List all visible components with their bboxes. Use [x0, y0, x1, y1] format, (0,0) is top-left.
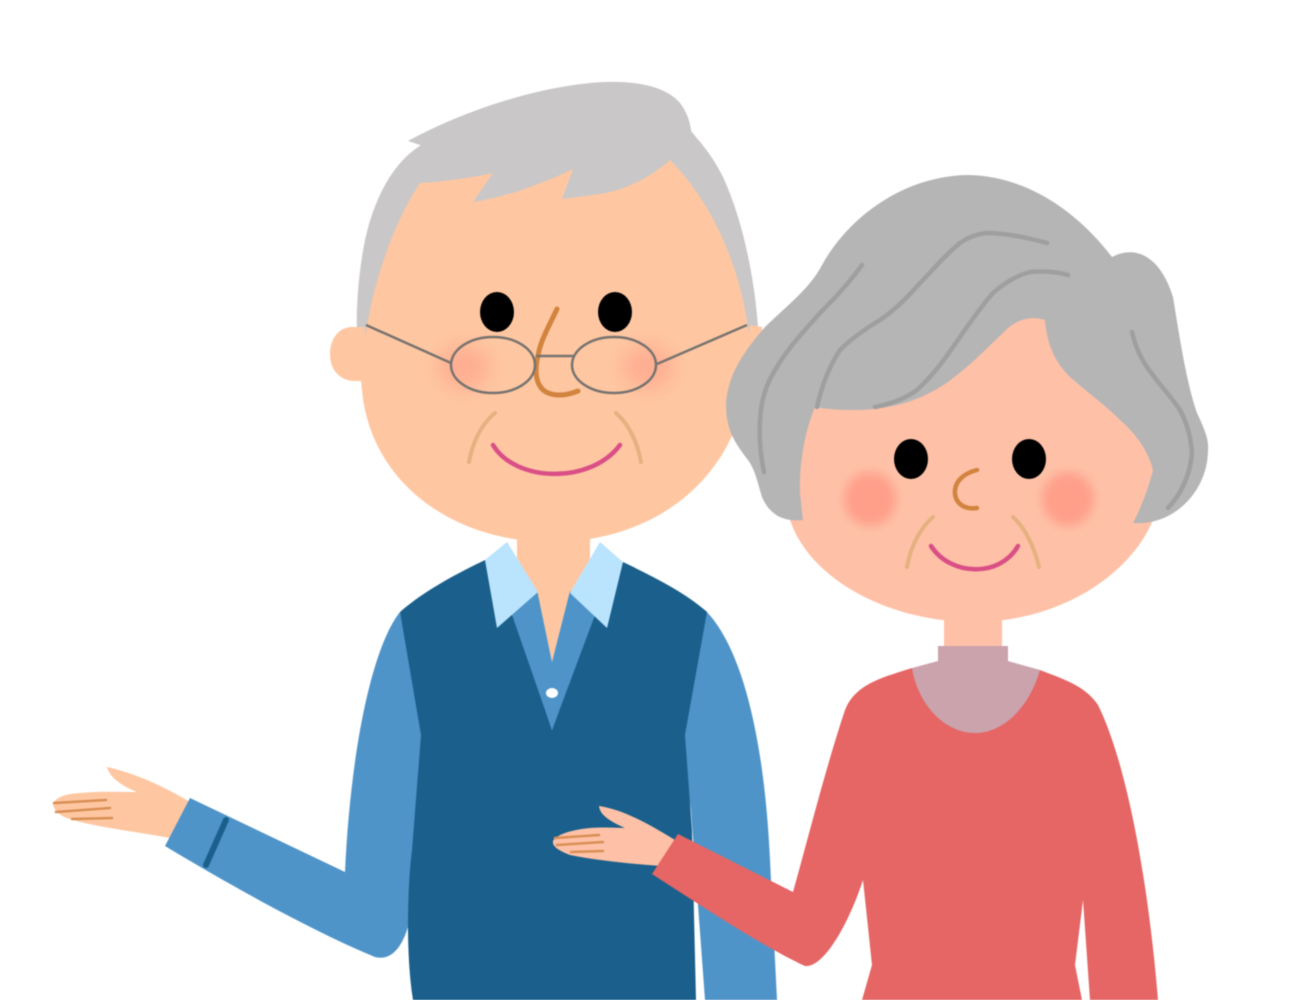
man: hair back [357, 130, 758, 390]
woman: nose [955, 470, 977, 508]
woman: eyes [894, 439, 1046, 479]
man: hand [53, 767, 190, 838]
man: vest [400, 560, 707, 1000]
woman: cheeks [844, 472, 1094, 526]
woman: mouth [931, 546, 1018, 569]
man: ears [330, 325, 762, 381]
man: wrinkles [469, 413, 641, 462]
woman: hair [726, 175, 1208, 523]
man: face [361, 160, 750, 542]
woman: fingers [555, 835, 603, 852]
woman: hair strands [760, 233, 1192, 508]
man: cuff line [206, 820, 226, 865]
woman: collar [912, 646, 1040, 733]
man: cheeks [438, 345, 674, 389]
woman: face [790, 310, 1170, 622]
woman: neck [944, 600, 1002, 660]
man: button [546, 688, 558, 698]
man: collar [485, 542, 623, 628]
woman: sweater [652, 668, 1158, 1000]
woman: hand [553, 806, 675, 866]
man: mouth [493, 445, 620, 474]
man: glasses [366, 325, 747, 393]
man: shirt placket [511, 590, 595, 730]
man: left sleeve [165, 612, 425, 958]
man: neck [517, 525, 590, 662]
man: nose [536, 309, 578, 395]
woman [553, 175, 1208, 1000]
man: eyes [480, 292, 632, 332]
man [53, 82, 777, 1000]
man: right sleeve [680, 610, 777, 1000]
man: fingers [54, 800, 112, 819]
man: hair top [408, 82, 693, 202]
woman: wrinkles [907, 517, 1039, 567]
